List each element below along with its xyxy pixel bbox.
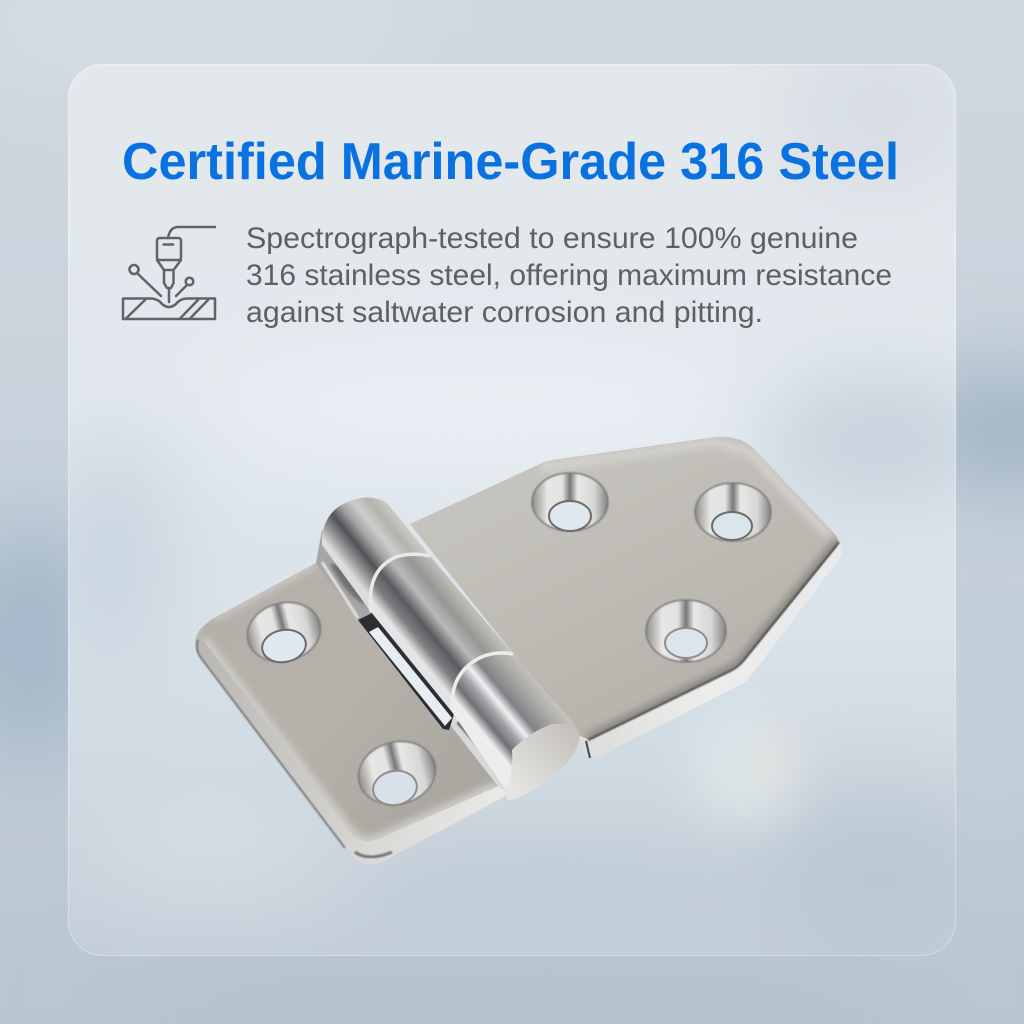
countersunk hole: lower right	[646, 600, 726, 662]
countersunk hole: left top	[241, 595, 327, 669]
hinge slot	[358, 613, 455, 730]
icon: spectrograph spark test	[123, 227, 215, 319]
description text: against saltwater corrosion and pitting.	[246, 296, 763, 329]
hinge left plate	[195, 560, 508, 864]
description text	[246, 222, 892, 329]
card border	[68, 64, 956, 956]
fold fillet along pin	[316, 530, 513, 792]
title: Certified Marine-Grade 316 Steel	[122, 133, 899, 191]
knuckle ring two	[452, 653, 513, 710]
knuckle ring one	[370, 554, 430, 612]
countersunk hole: left bottom	[352, 733, 442, 813]
pin end cap	[506, 724, 579, 800]
description text: Spectrograph-tested to ensure 100% genuine	[246, 222, 858, 255]
description text: 316 stainless steel, offering maximum resistance	[246, 259, 892, 292]
frosted glass card	[68, 64, 956, 956]
stainless steel hinge	[195, 437, 842, 864]
countersunk hole: top right	[695, 483, 771, 541]
countersunk hole: top centre	[532, 473, 608, 531]
hinge pin knuckles	[322, 498, 577, 790]
hinge right plate	[410, 437, 842, 759]
